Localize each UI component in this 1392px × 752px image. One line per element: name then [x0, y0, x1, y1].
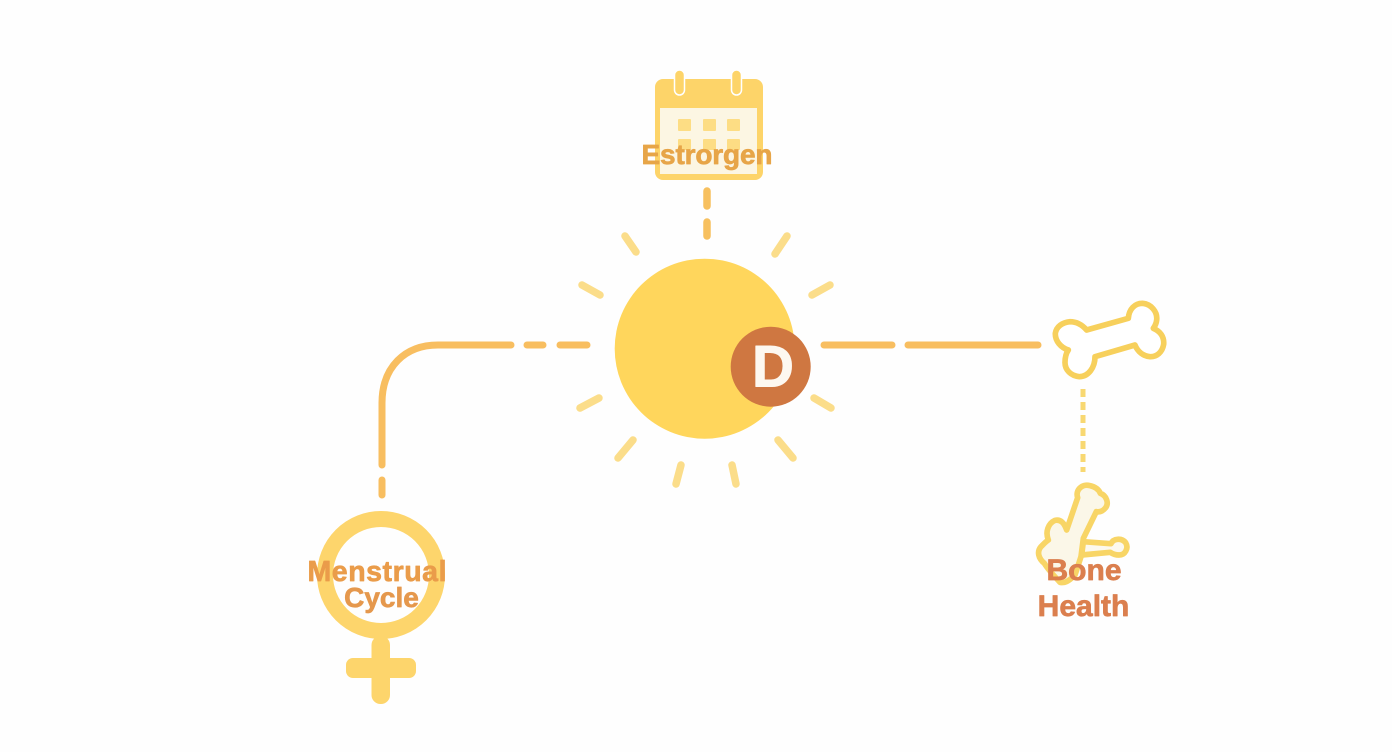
crossed bones	[1039, 485, 1127, 583]
badge letter D: D	[752, 334, 794, 400]
large diagonal bone	[1039, 485, 1107, 583]
label: Menstrual: Menstrual	[308, 556, 446, 588]
arrow: sun to menstrual cycle	[382, 345, 587, 495]
female symbol stem	[372, 636, 390, 704]
connector: bone to bone health dotted line	[1080, 389, 1086, 472]
icon: sun with vitamin D badge	[580, 236, 831, 484]
label: Cycle: Cycle	[344, 582, 419, 613]
arrow: sun to bone	[824, 342, 1038, 348]
calendar body	[655, 79, 763, 180]
female symbol ring	[325, 519, 437, 631]
icon: calendar with Estrogen label	[642, 70, 772, 180]
icon: crossed bones with Bone Health label	[1038, 485, 1129, 623]
icon: bone	[1055, 303, 1164, 377]
sun disc	[615, 259, 795, 439]
icon: female symbol with Menstrual Cycle label	[308, 519, 446, 704]
sun rays	[580, 236, 831, 484]
small horizontal bone	[1082, 539, 1127, 555]
label: Bone: Bone	[1046, 554, 1122, 587]
vitamin D badge	[731, 327, 811, 407]
calendar rings	[674, 70, 742, 95]
calendar day squares	[678, 119, 740, 150]
calendar page	[660, 108, 757, 174]
female symbol crossbar	[346, 658, 416, 678]
label: Estrogen: Estrorgen	[642, 139, 772, 170]
arrow: calendar to sun dashes	[703, 191, 711, 236]
label: Health: Health	[1038, 590, 1129, 623]
